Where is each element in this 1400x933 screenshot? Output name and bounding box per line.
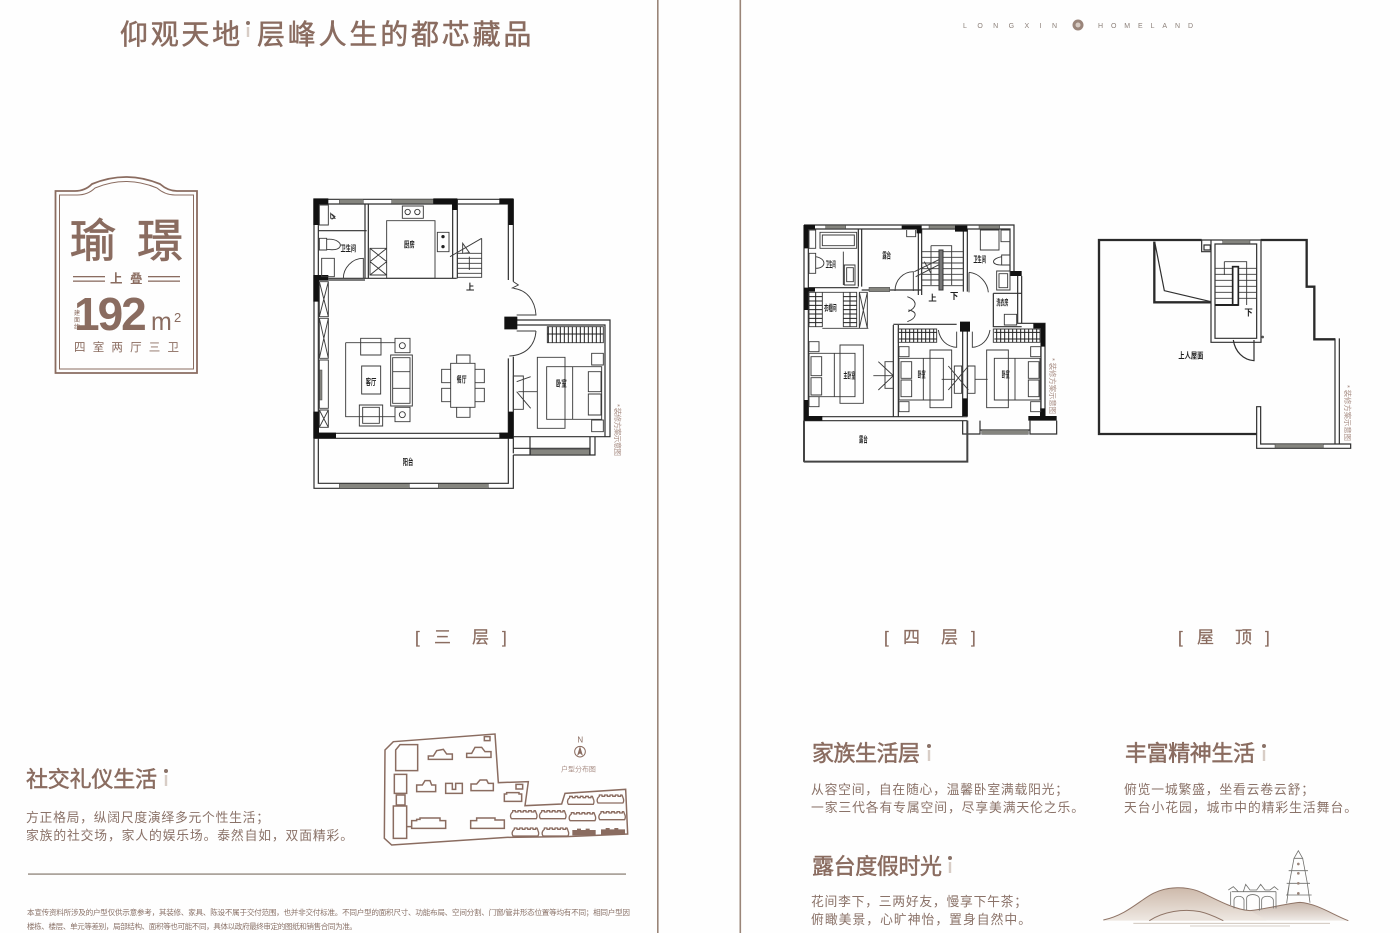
floor labels: ] (971, 628, 976, 647)
disclaimer (27, 907, 630, 931)
room labels: 上 (466, 282, 474, 292)
block: spiritual life: 丰富精神生活 (1125, 741, 1255, 766)
roof labels: 上人屋面 (1178, 350, 1203, 360)
room labels: 卧室 (556, 379, 567, 389)
block: social life: 方正格局，纵阔尺度演绎多元个性生活； (26, 810, 269, 826)
roof labels (1178, 308, 1253, 360)
badge: unit name and area: 约 (74, 323, 80, 331)
room labels: 下 (950, 291, 958, 301)
room labels: 上 (928, 293, 937, 303)
compass (575, 736, 585, 757)
block: spiritual life: 俯览一城繁盛，坐看云卷云舒； (1124, 782, 1314, 798)
floor labels: 四 (903, 628, 920, 647)
floor plan: third floor (313, 198, 610, 488)
title: 层峰人生的都芯藏品 (257, 19, 534, 50)
badge: unit name and area: 璟 (137, 215, 183, 267)
badge: unit name and area: 面 (74, 317, 80, 324)
room labels: 阳台 (403, 457, 413, 467)
floor labels: ] (1265, 628, 1270, 647)
room labels: 客厅 (366, 377, 376, 387)
badge: unit name and area: m (151, 308, 172, 336)
roof labels: 下 (1244, 308, 1253, 318)
badge: unit name and area: 建 (74, 309, 80, 317)
note: fourth floor: * 装修方案示意图 (1048, 358, 1058, 414)
floor labels: 层 (941, 628, 958, 647)
floor labels: [ (1178, 628, 1183, 647)
note: third floor: * 装修方案示意图 (613, 404, 623, 456)
footer rule (28, 873, 626, 875)
block: spiritual life: 天台小花园，城市中的精彩生活舞台。 (1124, 800, 1357, 815)
room labels: 露台 (882, 250, 891, 260)
floor labels: 屋 (1197, 628, 1214, 647)
block: terrace holiday: 花间李下，三两好友，慢享下午茶； (811, 894, 1027, 910)
room labels: 衣帽间 (824, 303, 837, 313)
block: family floor: 一家三代各有专属空间，尽享美满天伦之乐。 (811, 800, 1084, 815)
room labels: 卧室 (918, 370, 926, 380)
floor plan: roof (1099, 240, 1351, 448)
floor labels (415, 628, 1270, 647)
room labels: 卫生间 (826, 260, 836, 270)
room labels: 主卧室 (843, 370, 855, 380)
block: terrace holiday: 露台度假时光 (812, 854, 942, 879)
compass: N (577, 736, 583, 745)
room labels: 洗衣房 (996, 298, 1008, 308)
block: family floor (811, 741, 1084, 815)
block: social life (26, 767, 353, 843)
room labels: 露台 (859, 435, 868, 445)
floor plan: fourth floor (804, 225, 1057, 462)
site plan: 户型分布图 (561, 764, 596, 773)
room labels: 厨房 (404, 239, 415, 249)
furniture and fixtures (319, 205, 603, 432)
room labels: 卫生间 (341, 244, 356, 254)
block: family floor: 从容空间，自在随心，温馨卧室满载阳光； (811, 782, 1068, 798)
badge: unit name and area: 2 (174, 310, 181, 325)
disclaimer: 本宣传资料所涉及的户型仅供示意参考，其装修、家具、陈设不属于交付范围，也并非交付标准。不同户型的面积尺寸、功能布局、空间分割、门窗/管井形态位置等均有不同；相同户型因 (27, 907, 630, 917)
block: terrace holiday: 俯瞰美景，心旷神怡，置身自然中。 (811, 912, 1031, 927)
floor labels: 三 (434, 628, 451, 647)
block: social life: 家族的社交场，家人的娱乐场。泰然自如，双面精彩。 (26, 828, 353, 843)
badge: unit name and area: 192 (74, 288, 145, 340)
room labels (341, 239, 567, 467)
floor labels: 顶 (1235, 628, 1252, 647)
room labels: 卫生间 (973, 254, 986, 264)
block: spiritual life (1124, 741, 1357, 815)
fixtures and furniture (809, 230, 1041, 412)
brand line (963, 20, 1193, 30)
room labels (824, 250, 1010, 445)
block: terrace holiday (811, 854, 1031, 927)
floor labels: 层 (472, 628, 489, 647)
brand line: HOMELAND (1098, 23, 1193, 30)
note: roof: * 装修方案示意图 (1343, 385, 1353, 441)
floor plan: fourth floor: 卧室 (1002, 370, 1010, 380)
badge: unit name and area: 四室两厅三卫 (74, 340, 186, 354)
block: family floor: 家族生活层 (812, 741, 920, 766)
title (120, 19, 534, 50)
floor labels: [ (415, 628, 420, 647)
room labels: 餐厅 (457, 375, 467, 385)
brand line: LONGXIN (963, 23, 1057, 30)
disclaimer: 楼栋、楼层、单元等差别，局部结构、面积等也可能不同，具体以政府最终审定的图纸和销售合同为准。 (27, 921, 357, 931)
badge: unit name and area: 叠 (130, 272, 143, 286)
illustration: hills, gate and pagoda (1103, 851, 1348, 926)
badge: unit name and area: 上 (110, 272, 123, 286)
floor labels: ] (502, 628, 507, 647)
title: 仰观天地 (120, 19, 243, 50)
block: social life: 社交礼仪生活 (26, 767, 157, 792)
floor labels: [ (884, 628, 889, 647)
badge: unit name and area (56, 177, 197, 373)
badge: unit name and area: 瑜 (70, 215, 116, 267)
site plan (384, 734, 628, 845)
stair and door (1215, 262, 1264, 361)
